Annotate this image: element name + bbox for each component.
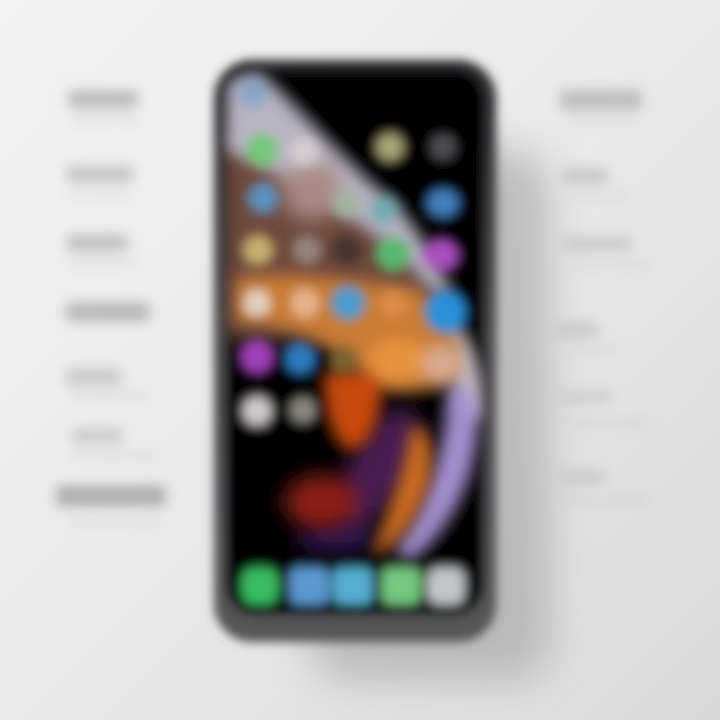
wallpaper: purple-black wedge <box>297 409 420 550</box>
app icons <box>239 79 467 427</box>
phone screen <box>222 70 484 615</box>
wallpaper: pink upper patch <box>282 160 342 220</box>
dock icons <box>240 566 466 606</box>
wallpaper: pale right edge <box>440 310 483 420</box>
left column of labels <box>56 90 166 525</box>
wallpaper: pale swirl band <box>226 72 455 300</box>
wallpaper: red-orange centre <box>325 372 381 450</box>
wallpaper: orange band <box>236 275 459 391</box>
wallpaper: lavender edge <box>395 385 477 560</box>
wallpaper: orange stripe <box>372 425 432 555</box>
phone body <box>214 60 496 642</box>
wallpaper: dark brown left column <box>222 130 440 350</box>
phone <box>214 60 496 642</box>
wallpaper: red streak <box>286 476 358 528</box>
right column of labels <box>552 90 652 503</box>
wallpaper: bright orange and peach highlight <box>368 338 462 384</box>
phone drop shadow <box>310 150 550 680</box>
